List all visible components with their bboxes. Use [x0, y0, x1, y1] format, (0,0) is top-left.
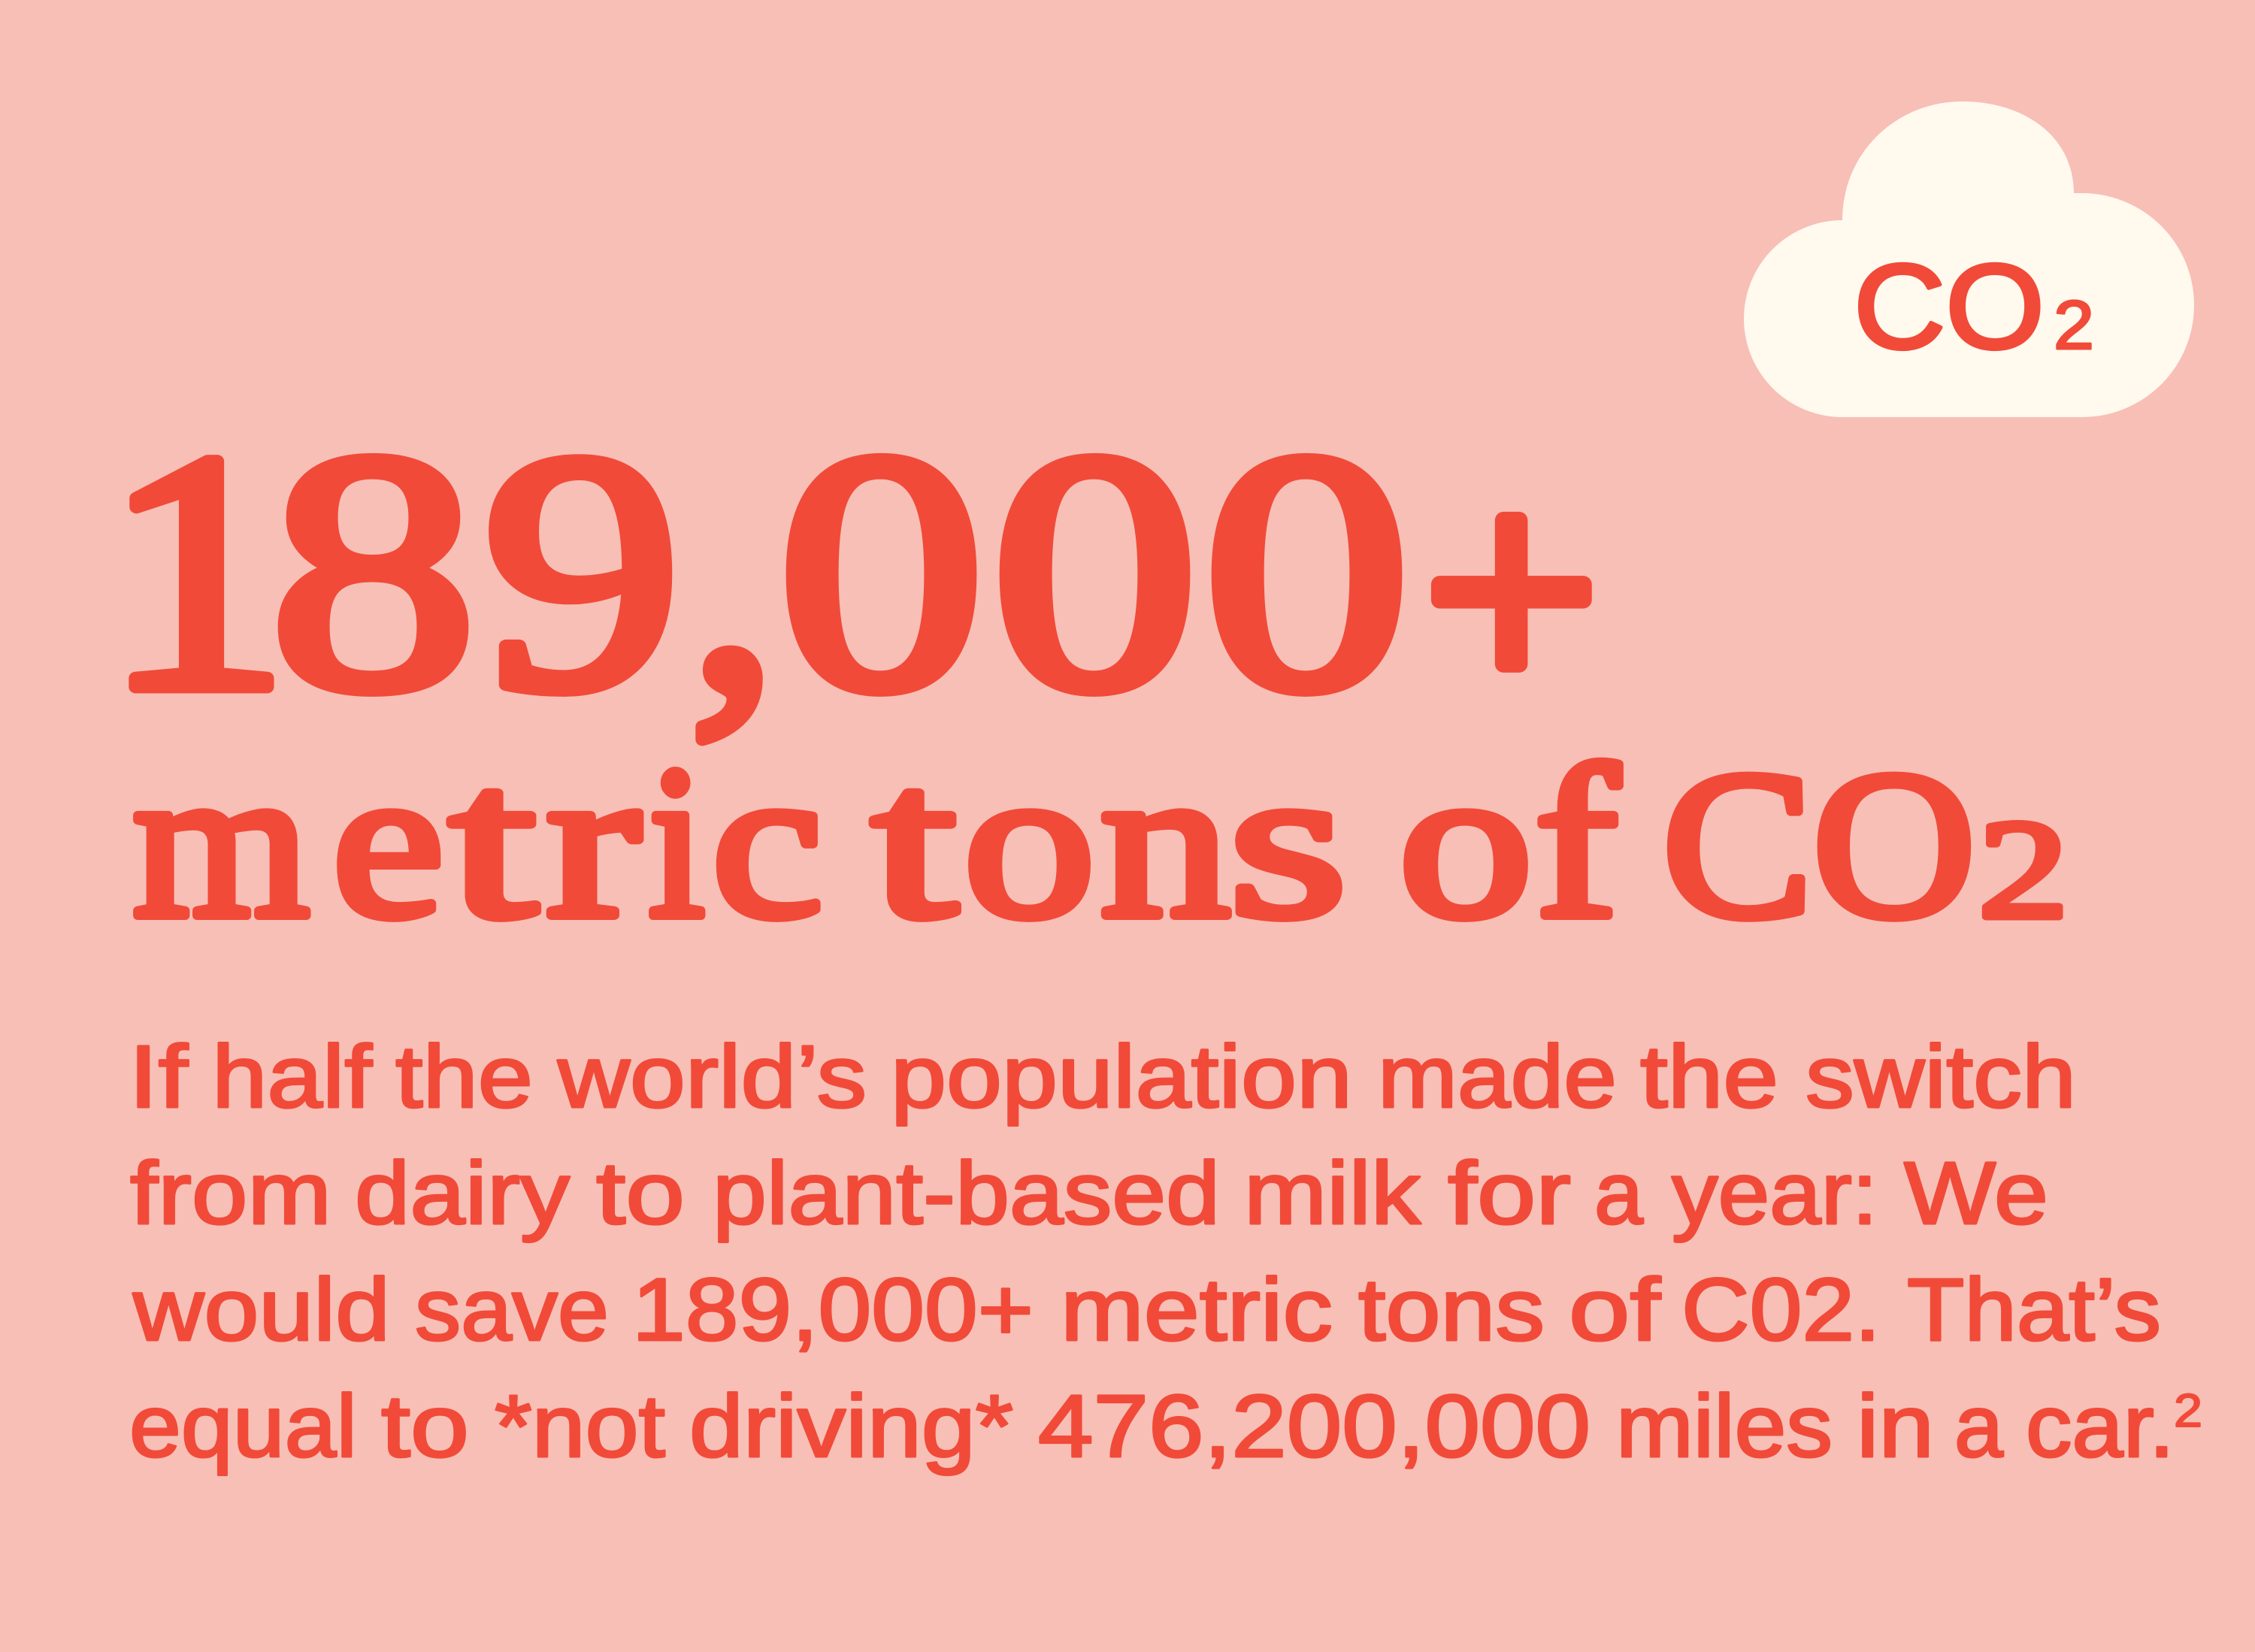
headline number: 0	[778, 383, 985, 761]
body paragraph: milk	[1244, 1144, 1421, 1243]
headline number: 9	[483, 383, 681, 761]
body paragraph: That’s	[1907, 1260, 2161, 1360]
body paragraph: from	[130, 1144, 331, 1243]
body paragraph: miles	[1616, 1377, 1833, 1476]
body paragraph: plant-based	[713, 1144, 1220, 1243]
body paragraph: save	[415, 1260, 609, 1360]
body paragraph: C02.	[1681, 1260, 1881, 1360]
headline number: +	[1424, 420, 1598, 761]
subheading: metric tons of CO2: e	[332, 722, 444, 963]
body paragraph: the	[1640, 1027, 1778, 1127]
headline number: 0	[1203, 383, 1410, 761]
subheading: metric tons of CO2: t	[872, 722, 958, 963]
body paragraph: 476,200,000	[1038, 1377, 1591, 1476]
icon: CO2 cloud	[1744, 101, 2194, 417]
subheading: metric tons of CO2: t	[449, 722, 537, 963]
cloud label: CO2: CO	[1854, 239, 2045, 374]
body paragraph: *not	[495, 1377, 665, 1476]
subheading: metric tons of CO2: CO	[1663, 728, 1975, 961]
body paragraph: a	[1954, 1377, 2003, 1476]
subheading: metric tons of CO2: f	[1535, 722, 1621, 963]
cloud shape	[1744, 101, 2194, 417]
subheading: metric tons of CO2: r	[546, 722, 640, 963]
headline number: 1	[103, 383, 289, 761]
body paragraph: for	[1448, 1144, 1571, 1243]
footnote marker: 2	[2174, 1385, 2202, 1437]
body paragraph: a	[1594, 1144, 1643, 1243]
body paragraph: tons	[1358, 1260, 1545, 1360]
body paragraph: switch	[1806, 1027, 2076, 1127]
body paragraph: the	[395, 1027, 533, 1127]
cloud label: CO2: 2	[2054, 287, 2094, 364]
body paragraph: would	[132, 1260, 390, 1360]
body paragraph: metric	[1061, 1260, 1333, 1360]
subheading: metric tons of CO2: i	[649, 722, 705, 963]
body paragraph: driving*	[689, 1377, 1013, 1476]
body paragraph: We	[1904, 1144, 2048, 1243]
body paragraph: to	[381, 1377, 469, 1476]
subheading: metric tons of CO2: c	[712, 722, 823, 963]
body paragraph: If	[129, 1027, 188, 1127]
headline number	[103, 383, 1598, 761]
subheading: metric tons of CO2: s	[1229, 722, 1347, 963]
body paragraph: half	[212, 1027, 372, 1127]
body paragraph: made	[1378, 1027, 1617, 1127]
subheading: metric tons of CO2: 2	[1978, 791, 2069, 948]
headline number: ,	[689, 383, 779, 761]
body paragraph: 189,000+	[632, 1260, 1034, 1360]
body paragraph: in	[1857, 1377, 1934, 1476]
body paragraph: of	[1569, 1260, 1660, 1360]
body paragraph: dairy	[355, 1144, 570, 1243]
subheading: metric tons of CO2: m	[133, 722, 310, 963]
body paragraph: world’s	[557, 1027, 867, 1127]
subheading: metric tons of CO2: o	[964, 722, 1095, 963]
subheading: metric tons of CO2	[133, 722, 2069, 963]
body paragraph: equal	[129, 1377, 357, 1476]
body paragraph: car.	[2026, 1377, 2175, 1476]
headline number: 0	[991, 383, 1198, 761]
subheading: metric tons of CO2: n	[1100, 722, 1230, 963]
headline number: 8	[270, 383, 477, 761]
body paragraph: year:	[1672, 1144, 1878, 1243]
body paragraph	[129, 1027, 2202, 1476]
body paragraph: to	[596, 1144, 685, 1243]
body paragraph: population	[891, 1027, 1352, 1127]
subheading: metric tons of CO2: o	[1399, 722, 1533, 963]
